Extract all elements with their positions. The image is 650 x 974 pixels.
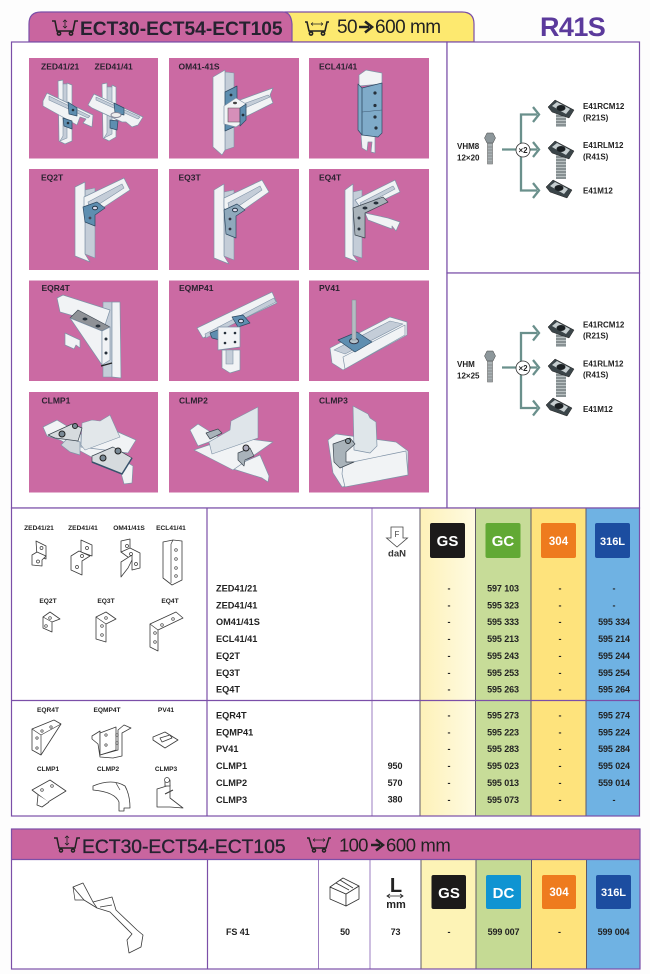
label VHM8 12×20: VHM8 (457, 142, 479, 151)
label E41RCM12: E41RCM12 (583, 102, 624, 111)
panel: tile EQ3T (169, 169, 299, 270)
small parts labels: OM41/41S (113, 525, 145, 532)
icon: box (330, 878, 359, 906)
illustration EQMP41 (197, 292, 277, 373)
force values: 380 (388, 794, 402, 804)
label E41RLM12: E41RLM12 (583, 141, 623, 150)
header tab: yellow range (285, 12, 474, 42)
small parts labels: EQ4T (161, 598, 179, 605)
label EQ4T: EQ4T (319, 172, 342, 182)
GS values: - (448, 651, 451, 661)
header tab: pink channel names (29, 12, 292, 42)
label VHM 12×25: 12×25 (457, 372, 480, 380)
small parts labels: EQMP4T (93, 707, 121, 714)
304 values: - (559, 710, 562, 720)
icon: length mm: L (390, 875, 402, 897)
GS values: - (448, 744, 451, 754)
header band (12, 829, 640, 860)
GS values: - (448, 600, 451, 610)
label CLMP1: CLMP1 (42, 396, 71, 406)
names block B: CLMP3 (216, 795, 247, 805)
304 values: - (559, 795, 562, 805)
GC values: 595 013 (487, 778, 519, 788)
icon: length mm: mm (386, 899, 406, 911)
names block B: CLMP2 (216, 778, 247, 788)
304 values: - (559, 668, 562, 678)
GS values: - (448, 710, 451, 720)
label FS 41: FS 41 (226, 927, 250, 937)
names block A: EQ2T (216, 651, 240, 661)
range end: 600 mm (386, 834, 450, 856)
label E41RLM12: (R41S) (583, 370, 609, 380)
line icon EQ2T (43, 612, 60, 632)
heading: ECT30-ECT54-ECT105 (82, 837, 286, 858)
panel: tile EQ2T (29, 169, 158, 270)
icon: length mm (386, 875, 406, 911)
names block B: EQR4T (216, 710, 247, 720)
304 values: - (559, 634, 562, 644)
line icon ZED41/41 (71, 540, 92, 575)
small parts labels: CLMP2 (97, 766, 120, 773)
label PV41: PV41 (319, 283, 340, 293)
icon: ×2: ×2 (518, 364, 528, 373)
GC values: 595 263 (487, 684, 519, 694)
316L values: 595 214 (598, 634, 630, 644)
arrow (371, 840, 383, 850)
illustration CLMP1 (43, 415, 136, 484)
badge GS: GS (438, 885, 460, 902)
icon: span cart (305, 22, 329, 35)
316L values: 595 024 (598, 761, 630, 771)
illustration EQR4T (57, 295, 121, 378)
316L values: 595 254 (598, 668, 630, 678)
value GS: - (448, 927, 451, 937)
316L values: 595 284 (598, 744, 630, 754)
GC values: 595 073 (487, 795, 519, 805)
illustration PV41 (330, 300, 407, 370)
line icon OM41/41S (121, 539, 140, 577)
column 316L (586, 860, 640, 969)
small parts labels: CLMP3 (155, 766, 178, 773)
label EQMP41: EQMP41 (179, 283, 214, 293)
panel: fixings VHM8 (447, 42, 640, 273)
label VHM 12×25: VHM (457, 360, 475, 369)
badge 304: 304 (549, 536, 569, 548)
316L values: - (613, 584, 616, 594)
line icon EQ3T (96, 612, 116, 642)
arrow (359, 22, 372, 32)
illustration CLMP2 (190, 407, 273, 482)
316L values: 595 264 (598, 684, 630, 694)
GS values (448, 584, 451, 805)
panel: tile PV41 (309, 280, 429, 381)
force values: 950 (388, 761, 402, 771)
small parts labels: ZED41/21 (24, 525, 54, 532)
badge 316L: 316L (601, 887, 626, 899)
column DC (476, 860, 532, 969)
line icon PV41 (153, 732, 178, 748)
panel: tile EQMP41 (169, 280, 299, 381)
label CLMP2: CLMP2 (179, 396, 208, 406)
badge DC (486, 875, 521, 909)
badge GC (486, 523, 520, 558)
names block A: EQ3T (216, 668, 240, 678)
icon: E41RCM12 (548, 320, 574, 347)
heading: ECT30-ECT54-ECT105 (80, 19, 283, 40)
label VHM8 12×20: 12×20 (457, 154, 480, 162)
316L values: 595 274 (598, 710, 630, 720)
line icon EQ4T (150, 612, 183, 651)
badge 304 (542, 875, 576, 909)
label EQ2T: EQ2T (41, 172, 64, 182)
small parts labels: EQ2T (39, 598, 57, 605)
304 values: - (559, 600, 562, 610)
GS values: - (448, 795, 451, 805)
304 values: - (559, 761, 562, 771)
panel: tile ZED (29, 58, 158, 158)
illustration EQ4T (345, 180, 400, 262)
icon: force daN (386, 527, 408, 560)
316L values: 595 334 (598, 617, 630, 627)
column 316L (586, 508, 640, 816)
column GC (476, 508, 531, 816)
GS values: - (448, 617, 451, 627)
316L values: - (613, 795, 616, 805)
line icon EQMP4T (92, 725, 131, 758)
line icon ZED41/21 (32, 541, 46, 566)
panel: tile CLMP3 (309, 392, 429, 492)
icon: ×2 (516, 361, 530, 375)
badge 304 (541, 523, 576, 558)
GS values: - (448, 668, 451, 678)
small parts labels: ZED41/41 (68, 525, 98, 532)
icon: E41RLM12 (548, 359, 574, 397)
label E41RLM12: E41RLM12 (583, 360, 623, 368)
illustration ECL41/41 (358, 70, 382, 153)
panel: tile OM41-41S (169, 58, 299, 158)
badge GS (430, 523, 465, 558)
304 values: - (559, 584, 562, 594)
column 304 (532, 860, 586, 969)
label E41RCM12: (R21S) (583, 332, 609, 340)
names block A: EQ4T (216, 684, 240, 694)
icon: bolt (484, 133, 496, 164)
label ECL41/41: ECL41/41 (319, 62, 358, 72)
small parts labels: CLMP1 (37, 766, 60, 773)
value DC: 599 007 (488, 927, 520, 937)
316L values (598, 584, 630, 805)
names block B: PV41 (216, 744, 238, 754)
GS values: - (448, 634, 451, 644)
range text end: 600 mm (375, 17, 441, 38)
316L values: 595 244 (598, 651, 630, 661)
panel: applications frame (12, 42, 447, 508)
force values (388, 761, 402, 804)
316L values: 559 014 (598, 778, 630, 788)
panel: tile CLMP1 (29, 392, 158, 492)
illustration CLMP3 (328, 406, 408, 487)
icon: ×2: ×2 (518, 146, 528, 155)
GC values (487, 584, 519, 805)
label CLMP3: CLMP3 (319, 396, 348, 406)
small parts labels (24, 525, 186, 773)
316L values: - (613, 600, 616, 610)
label EQ3T: EQ3T (178, 172, 202, 182)
illustration EQ2T (75, 178, 130, 262)
small parts labels: PV41 (158, 707, 174, 714)
illustration EQ3T (214, 180, 269, 264)
badge GS (432, 875, 466, 909)
icon: bolt (484, 351, 496, 382)
illustration ZED41/41 (88, 83, 143, 141)
icon: force daN: daN (388, 548, 406, 560)
names block A: ECL41/41 (216, 634, 257, 644)
value pack qty: 50 (340, 927, 350, 937)
names block B: CLMP1 (216, 761, 247, 771)
panel: tile ECL41/41 (309, 58, 429, 158)
GS values: - (448, 684, 451, 694)
names block B: EQMP41 (216, 728, 253, 738)
range text: 50 (337, 17, 357, 38)
panel: product table (12, 508, 640, 816)
small parts labels: EQ3T (97, 598, 115, 605)
badge 316L (595, 523, 630, 558)
line icon CLMP2 (93, 782, 130, 811)
316L values: 595 224 (598, 728, 630, 738)
GS values: - (448, 761, 451, 771)
panel: tile EQR4T (29, 280, 158, 381)
label ZED41/41: ZED41/41 (94, 62, 133, 72)
small parts labels: EQR4T (37, 707, 59, 714)
names block A: ZED41/21 (216, 584, 257, 594)
304 values: - (559, 744, 562, 754)
304 values: - (559, 684, 562, 694)
label ZED41/21: ZED41/21 (41, 62, 80, 72)
panel: fixings VHM (447, 273, 640, 508)
label EQR4T: EQR4T (42, 283, 71, 293)
force values: 570 (388, 778, 402, 788)
badge 316L (596, 875, 631, 909)
label OM41-41S: OM41-41S (178, 62, 220, 72)
badge GC: GC (492, 533, 514, 550)
icon: force daN: F (395, 530, 400, 539)
badge 316L: 316L (600, 536, 625, 548)
panel: tile EQ4T (309, 169, 429, 270)
title R41S: R41S (540, 12, 605, 42)
value 304: - (558, 927, 561, 937)
GS values: - (448, 584, 451, 594)
GC values: 595 243 (487, 651, 519, 661)
GS values: - (448, 778, 451, 788)
304 values: - (559, 617, 562, 627)
GC values: 595 213 (487, 634, 519, 644)
range start: 100 (339, 834, 368, 856)
icon: E41M12 (546, 398, 572, 416)
304 values: - (559, 728, 562, 738)
icon: span cart (307, 838, 331, 852)
label E41M12: E41M12 (583, 186, 613, 196)
icon: load cart (52, 20, 78, 35)
illustration ZED41/21 (43, 80, 93, 144)
line icon EQR4T (32, 720, 61, 755)
illustration OM41-41S (213, 70, 273, 155)
GC values: 595 323 (487, 600, 519, 610)
arrows: split into three (502, 107, 539, 198)
names block B (216, 710, 253, 805)
arrows: split into three (502, 326, 539, 416)
GC values: 595 023 (487, 761, 519, 771)
column GS (421, 860, 476, 969)
panel: tile CLMP2 (169, 392, 299, 492)
value length: 73 (391, 927, 400, 937)
304 values (559, 584, 562, 805)
304 values: - (559, 778, 562, 788)
names block A: OM41/41S (216, 617, 260, 627)
label E41M12: E41M12 (583, 405, 613, 414)
value 316L: 599 004 (598, 927, 630, 937)
GC values: 595 223 (487, 728, 519, 738)
badge GS: GS (437, 533, 458, 550)
badge 304: 304 (549, 887, 569, 899)
GC values: 595 283 (487, 744, 519, 754)
line icon ECL41/41 (163, 540, 182, 585)
column 304 (531, 508, 586, 816)
label E41RCM12: E41RCM12 (583, 320, 624, 330)
icon: load cart (54, 836, 80, 852)
panel: FS 41 table (12, 829, 640, 969)
line icon CLMP3 (157, 778, 183, 808)
line icon CLMP1 (32, 780, 66, 807)
GC values: 597 103 (487, 584, 519, 594)
GC values: 595 253 (487, 668, 519, 678)
label E41RCM12: (R21S) (583, 114, 609, 122)
small parts labels: ECL41/41 (156, 525, 186, 532)
icon: E41RLM12 (548, 141, 574, 179)
illustration: FS 41 spring (73, 883, 143, 953)
badge DC: DC (493, 885, 514, 902)
icon: ×2 (516, 143, 530, 157)
icon: E41M12 (546, 180, 572, 198)
names block A (216, 584, 260, 694)
column GS (420, 508, 476, 816)
icon: E41RCM12 (548, 100, 574, 127)
GS values: - (448, 728, 451, 738)
names block A: ZED41/41 (216, 600, 257, 610)
GC values: 595 333 (487, 617, 519, 627)
304 values: - (559, 651, 562, 661)
GC values: 595 273 (487, 710, 519, 720)
label E41RLM12: (R41S) (583, 152, 609, 162)
